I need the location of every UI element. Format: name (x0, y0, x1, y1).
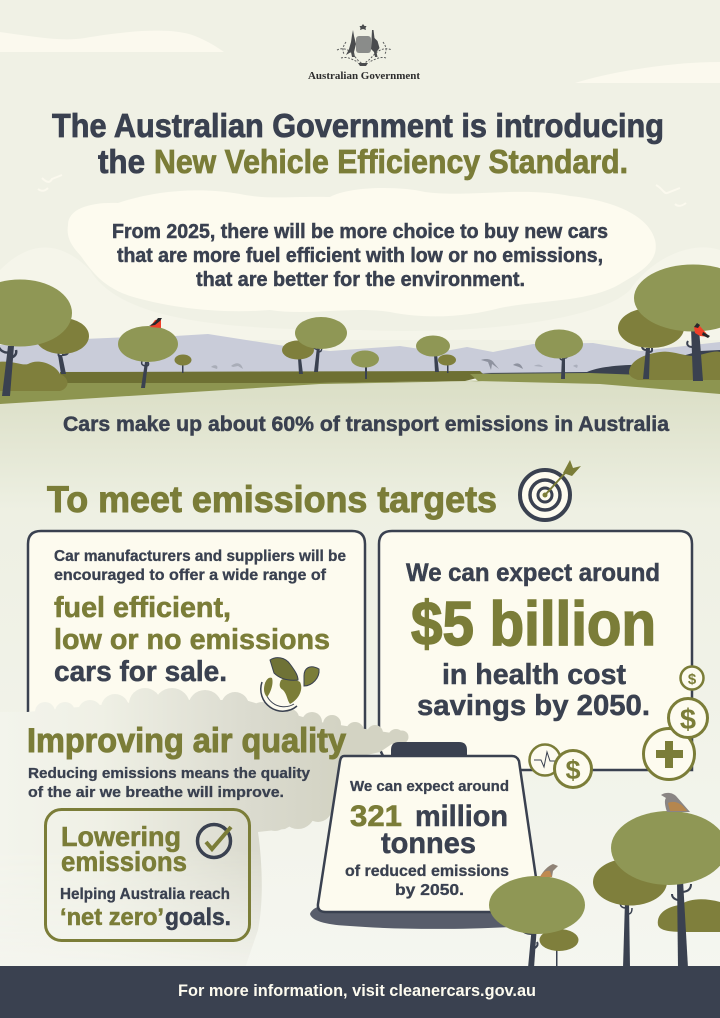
tree group: centre (282, 317, 347, 374)
panel: lowering emissions (46, 810, 250, 940)
panel: weight of reduced emissions: of reduced emissions (345, 863, 509, 880)
bird: brown on large tree (661, 793, 690, 812)
logo: Australian Government crest (308, 24, 421, 82)
bird: red left (149, 318, 162, 328)
cloud: intro background (68, 188, 656, 316)
icon: coins and medical plus: $ (565, 755, 581, 785)
logo: Australian Government crest: Australian Government (308, 71, 421, 82)
tree: mid left with bird (118, 326, 192, 388)
tree: large left (0, 280, 89, 374)
panel: manufacturers: Car manufacturers and suppliers will be (54, 548, 346, 565)
panel: health savings: savings by 2050. (417, 690, 650, 722)
intro text: that are more fuel efficient with low or no emissions, (117, 245, 603, 267)
panel: weight of reduced emissions: by 2050. (395, 882, 464, 899)
panel: health savings: in health cost (442, 659, 626, 691)
tree group: centre right (416, 336, 456, 373)
heading: to meet emissions targets: To meet emissions targets (47, 479, 497, 520)
panel: lowering emissions: emissions (61, 846, 187, 877)
icon: target with arrow (520, 460, 581, 520)
birds: right doves (656, 185, 686, 206)
panel: weight of reduced emissions (310, 742, 541, 929)
heading: improving air quality: Improving air quality (27, 722, 346, 760)
panel: manufacturers (28, 531, 365, 730)
tree: right mid (535, 330, 583, 379)
panel: lowering emissions: ‘net zero’ (60, 904, 164, 931)
panel: health savings (379, 531, 692, 770)
kangaroos right (481, 359, 578, 370)
landscape: distant hills (0, 334, 720, 375)
kangaroos left (211, 363, 243, 369)
panel: weight of reduced emissions: 321 (350, 800, 402, 833)
icon: check mark (198, 824, 231, 858)
tree: small centre (351, 350, 379, 379)
background sky (0, 0, 720, 400)
icon: coins and medical plus: $ (680, 704, 696, 736)
panel: health savings: We can expect around (406, 559, 660, 587)
panel: weight of reduced emissions: tonnes (381, 827, 476, 860)
landscape: dark ridge (480, 350, 720, 380)
icon: coins and medical plus (530, 666, 708, 788)
tree: large right (618, 264, 720, 381)
title: The Australian Government is introducing (52, 107, 664, 144)
panel: lowering emissions: Helping Australia reach (60, 886, 230, 903)
panel: manufacturers: low or no emissions (54, 624, 330, 656)
trunk: left front (0, 346, 16, 396)
statistic: cars share: Cars make up about 60% of transport emissions in Australia (63, 413, 669, 436)
text: air quality description (28, 765, 311, 801)
text: air quality description: of the air we breathe will improve. (28, 784, 284, 801)
bush: left (0, 362, 68, 391)
panel: lowering emissions: Lowering (61, 821, 181, 852)
bush: bottom right (658, 899, 720, 932)
panel: manufacturers: fuel efficient, (54, 592, 231, 624)
cloud: intro halo (0, 247, 720, 340)
intro text: that are better for the environment. (196, 269, 525, 291)
title: New Vehicle Efficiency Standard. (154, 143, 628, 180)
bird: brown on front tree (540, 864, 558, 877)
panel: manufacturers: encouraged to offer a wide range of (54, 567, 327, 584)
bush: right (629, 351, 720, 380)
panel: lowering emissions: goals. (165, 904, 231, 931)
panel: weight of reduced emissions: We can expect around (350, 778, 509, 795)
title: the (98, 143, 145, 180)
footer bar (0, 966, 720, 1018)
birds: left doves (38, 175, 62, 191)
tree: bottom right large (593, 811, 720, 968)
title (52, 107, 664, 180)
landscape: green ground (0, 373, 720, 404)
panel: manufacturers: cars for sale. (54, 656, 227, 688)
landscape: dark ground band (60, 371, 485, 385)
text: air quality description: Reducing emissions means the quality (28, 765, 311, 782)
smoke cloud (26, 688, 408, 950)
cloud: top left (0, 31, 224, 52)
panel: health savings: $5 billion (411, 590, 656, 659)
intro text: From 2025, there will be more choice to buy new cars (112, 221, 608, 243)
bird: red right (694, 323, 710, 338)
background lower ground (0, 380, 720, 980)
cloud: top right (575, 62, 720, 83)
icon: globe with leaves (261, 658, 319, 711)
intro text (112, 221, 608, 291)
icon: coins and medical plus: $ (688, 671, 697, 688)
panel: weight of reduced emissions: million (415, 800, 508, 833)
tree: bottom front (489, 876, 585, 968)
footer bar: For more information, visit cleanercars.gov.au (178, 981, 536, 1000)
